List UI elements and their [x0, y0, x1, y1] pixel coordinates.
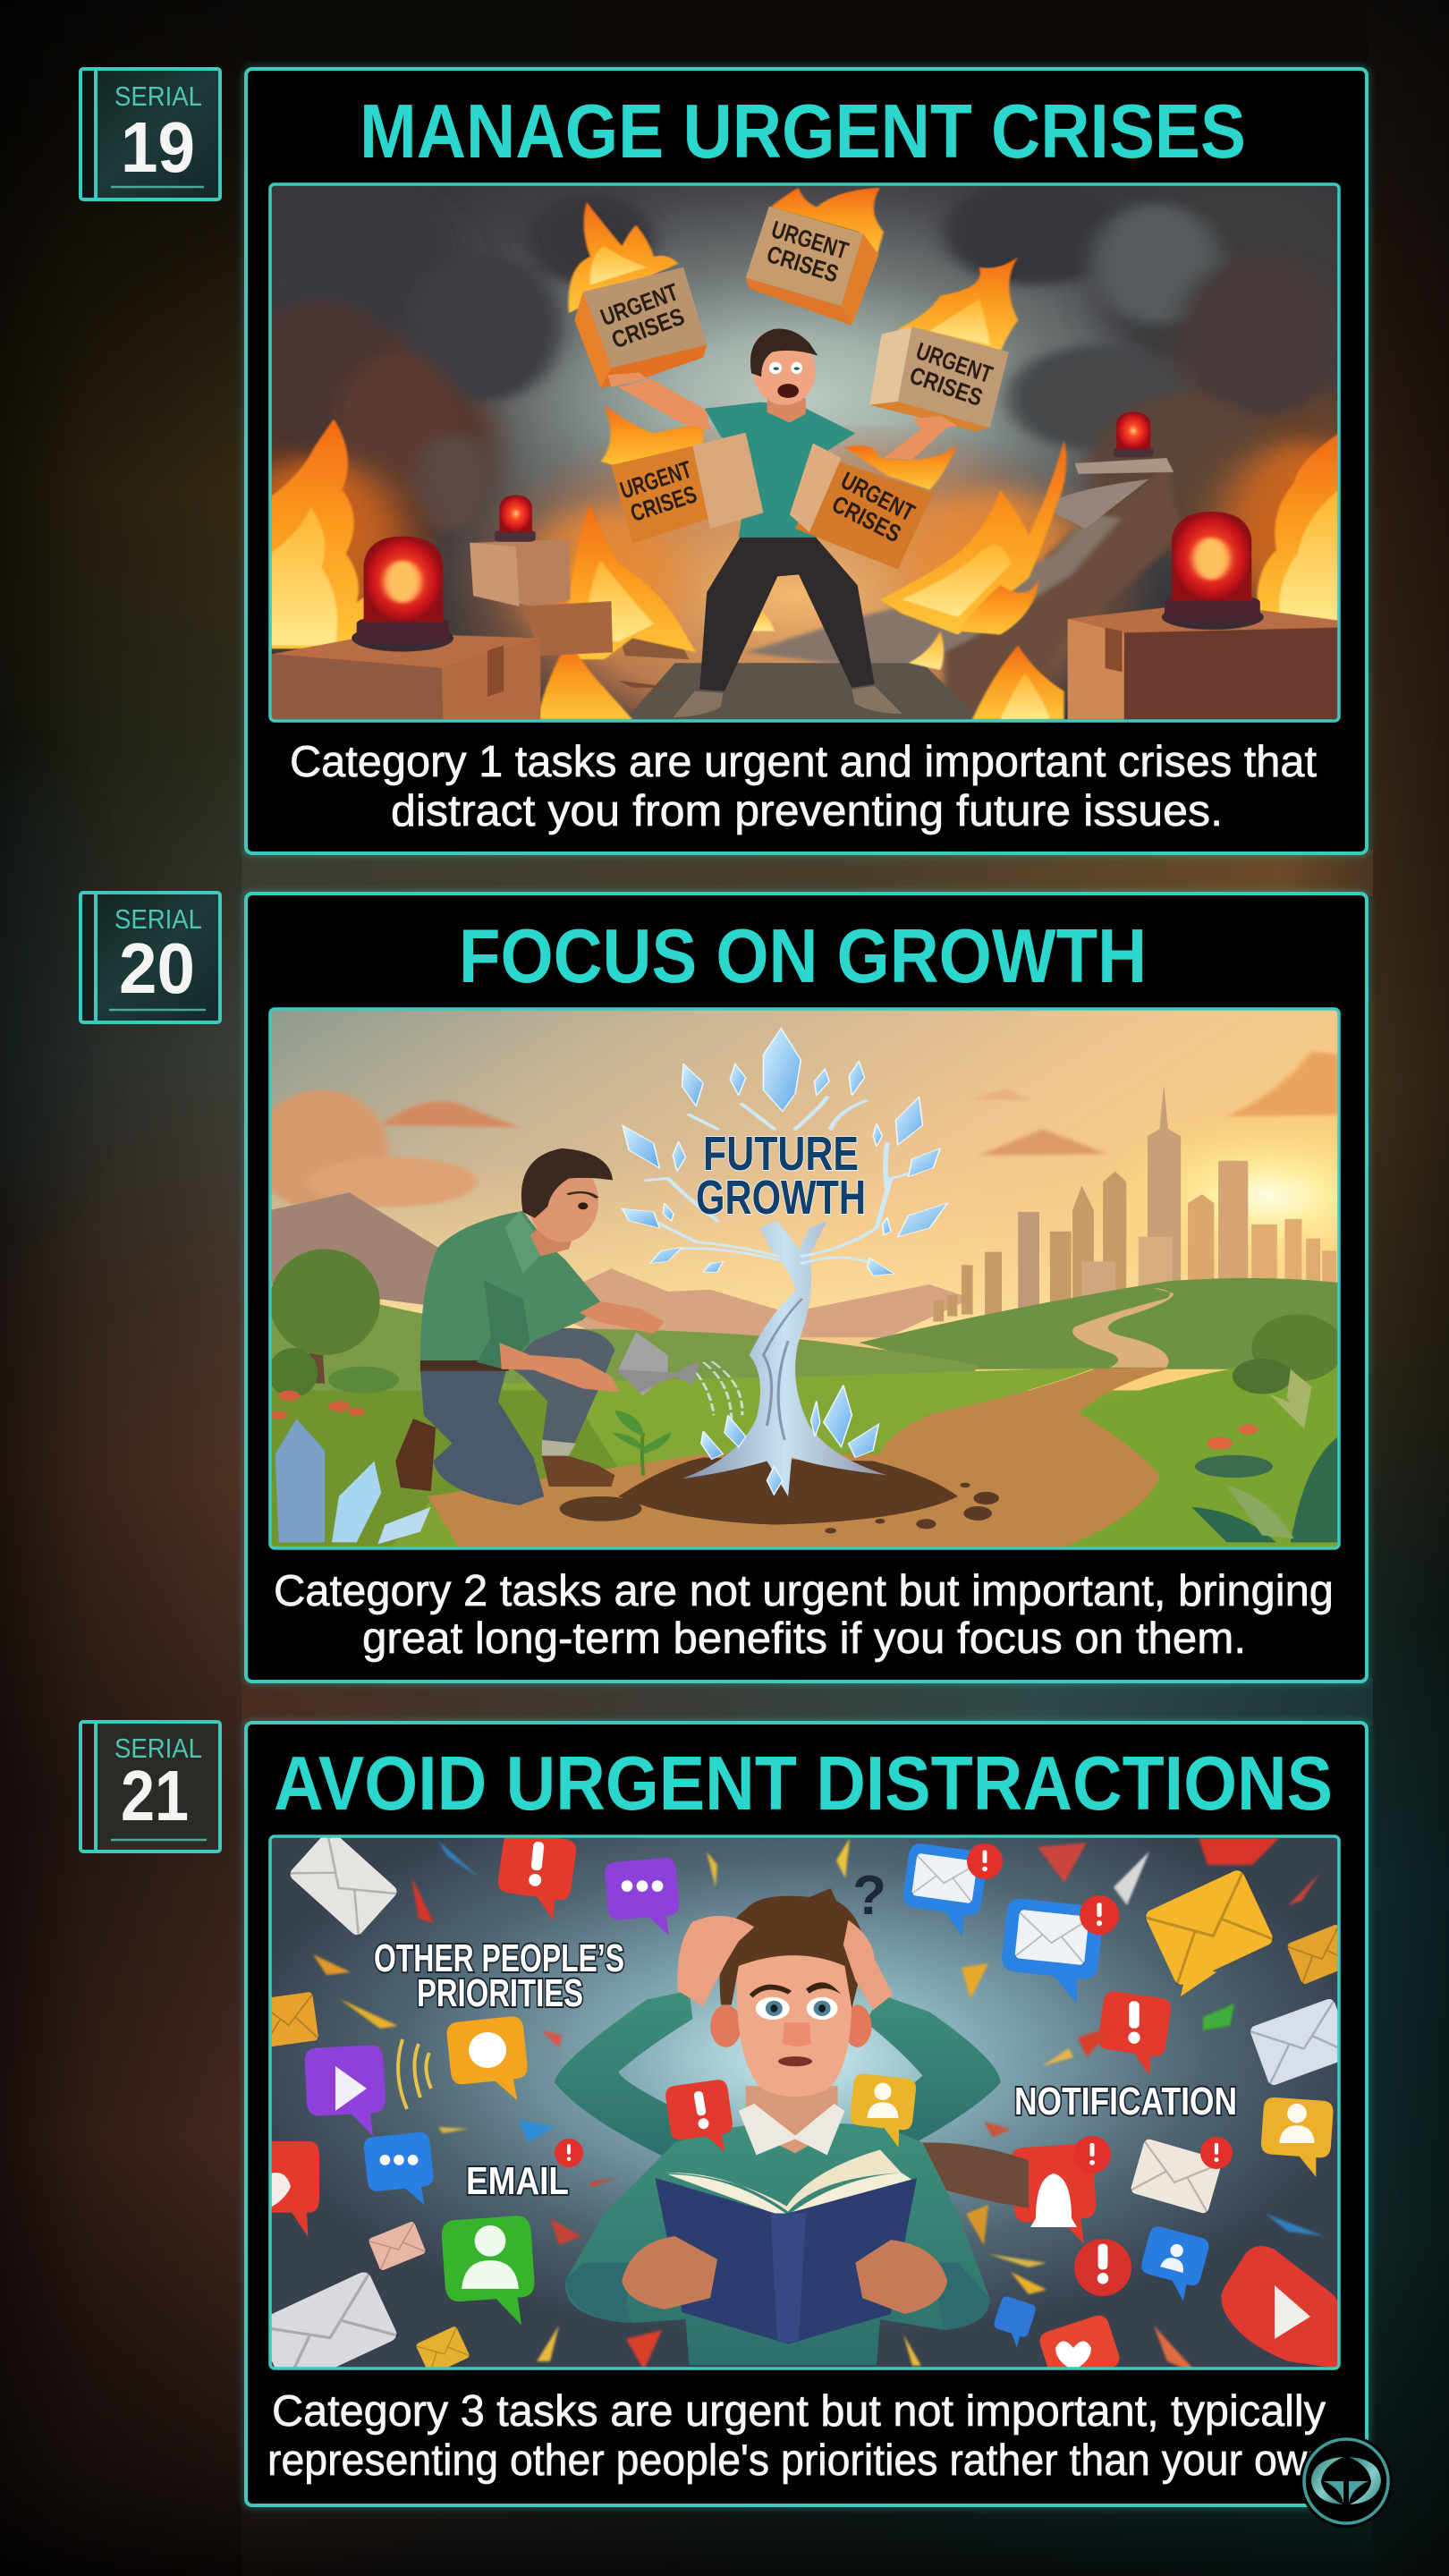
title: AVOID URGENT DISTRACTIONS [274, 1741, 1333, 1826]
box labels: URGENT [617, 456, 695, 504]
serial badge 19: 19 [121, 107, 195, 187]
foreground crystals [275, 1419, 325, 1542]
serial badge 20: 20 [119, 928, 195, 1008]
illustration: distracted reader surrounded by notifications [250, 1825, 1383, 2404]
right bush [1251, 1315, 1343, 1382]
man [699, 534, 875, 691]
crystal leaves [622, 1029, 947, 1495]
back boxes [470, 539, 571, 606]
panel: avoid urgent distractions [246, 1723, 1383, 2505]
question mark: ? [852, 1865, 886, 1927]
icons on chest [665, 2073, 917, 2159]
icon: round logo badge [1300, 2435, 1393, 2528]
flames above boxes [568, 188, 1018, 490]
paper shards [313, 1838, 1324, 2375]
notification labels: NOTIFICATION [1014, 2080, 1237, 2123]
illustration: man juggling burning boxes [272, 186, 1338, 719]
caption [290, 738, 1317, 835]
soil [618, 1458, 958, 1525]
panel: focus on growth [246, 894, 1449, 1682]
flying icons: back layer [254, 1828, 1354, 2404]
notification labels: EMAIL [466, 2159, 569, 2203]
title: MANAGE URGENT CRISES [360, 89, 1246, 174]
orange glow behind flames [222, 440, 1390, 648]
bottom right box [1068, 607, 1338, 633]
box lower left [611, 445, 710, 544]
box labels: URGENT [912, 337, 996, 388]
water [696, 1361, 742, 1422]
box right [898, 326, 1009, 428]
box top centre [746, 207, 863, 306]
box labels: URGENT [836, 467, 919, 527]
crystal tree label: GROWTH [696, 1171, 866, 1224]
serial badge 21 [80, 1722, 220, 1852]
caption: representing other people's priorities rather than your own. [267, 2436, 1342, 2485]
caption: great long-term benefits if you focus on them. [362, 1614, 1246, 1663]
box labels: CRISES [627, 480, 700, 527]
serial badge 19 [80, 69, 220, 199]
caption: Category 3 tasks are urgent but not important, typically [272, 2387, 1326, 2436]
man [395, 1419, 436, 1491]
box labels: URGENT [597, 278, 682, 331]
box labels: CRISES [608, 303, 688, 353]
box labels: CRISES [764, 241, 842, 288]
serial badge 21: 21 [121, 1756, 189, 1835]
box labels: URGENT [768, 216, 852, 265]
serial badge 20: SERIAL [114, 903, 202, 935]
box top left [583, 267, 707, 368]
panel: manage urgent crises [208, 69, 1390, 853]
notification labels [374, 1936, 1237, 2203]
caption [274, 1567, 1334, 1663]
crystal tree label [696, 1127, 866, 1224]
left tree [309, 1326, 325, 1384]
serial badge 21: SERIAL [114, 1733, 202, 1764]
reader with open book [555, 1888, 1029, 2365]
notification labels: PRIORITIES [417, 1971, 583, 2015]
serial badge 20 [80, 893, 220, 1022]
caption: Category 2 tasks are not urgent but important, bringing [274, 1567, 1334, 1615]
box lower right [795, 458, 933, 569]
sprout [642, 1433, 643, 1475]
hills [859, 1278, 1354, 1369]
sirens [352, 631, 453, 652]
rubble mound right [746, 462, 1184, 719]
city [933, 1085, 1336, 1321]
box labels [597, 216, 996, 549]
caption [267, 2387, 1342, 2485]
illustration: man watering crystal tree [250, 1002, 1449, 1567]
caption: distract you from preventing future issues. [391, 787, 1223, 835]
box labels: CRISES [906, 361, 986, 411]
notification labels: OTHER PEOPLE’S [374, 1936, 624, 1980]
tree trunk [682, 1221, 887, 1496]
title: FOCUS ON GROWTH [459, 914, 1147, 999]
caption: Category 1 tasks are urgent and important crises that [290, 738, 1317, 786]
serial badge 19: SERIAL [114, 80, 202, 112]
box labels: CRISES [827, 490, 905, 547]
bottom left box [272, 633, 540, 668]
dirt path [428, 1368, 1166, 1553]
crystal tree label: FUTURE [703, 1127, 859, 1181]
